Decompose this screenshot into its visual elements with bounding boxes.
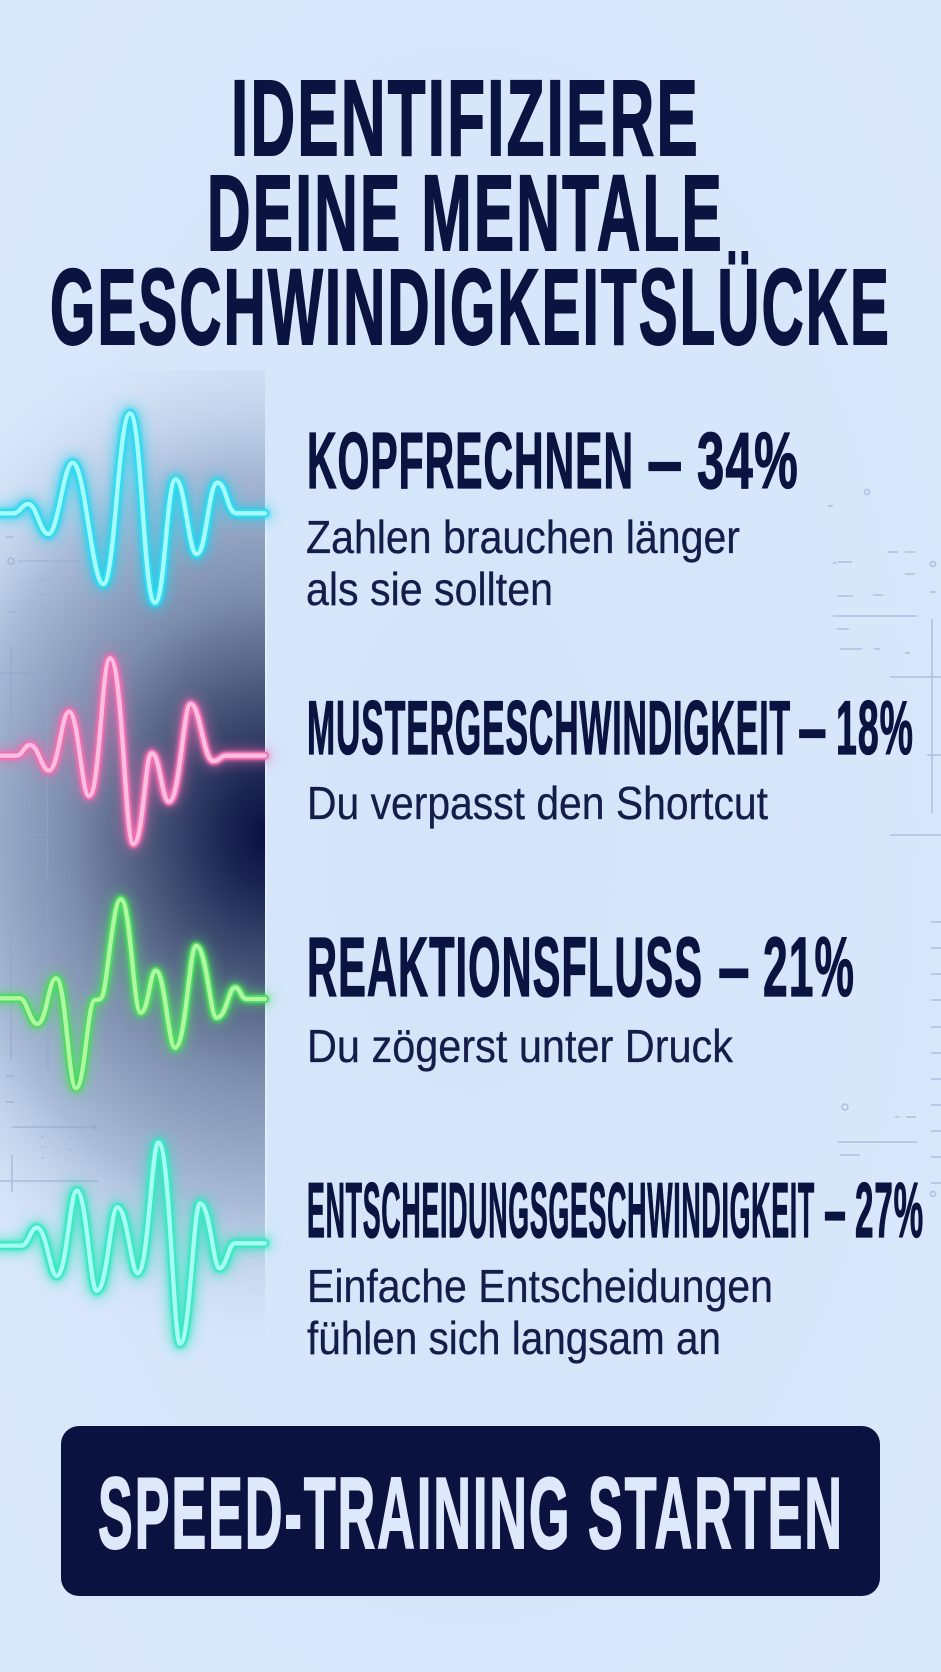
faint HUD marks right	[828, 490, 941, 1196]
button: call to action	[61, 1426, 880, 1596]
item: Kopfrechnen	[306, 416, 799, 615]
faint HUD marks left	[0, 537, 98, 1192]
item: Mustergeschwindigkeit	[307, 686, 914, 829]
description: Du zögerst unter Druck	[307, 1020, 734, 1072]
heading: –	[824, 1166, 847, 1254]
icon: green waveform	[0, 899, 265, 1088]
description: Du verpasst den Shortcut	[307, 777, 768, 829]
heading: KOPFRECHNEN	[307, 416, 634, 505]
heading: –	[647, 416, 684, 505]
heading: –	[798, 686, 828, 771]
title	[50, 57, 891, 367]
heading: 21%	[763, 920, 855, 1014]
description: Zahlen brauchen länger	[306, 511, 740, 563]
heading: –	[718, 920, 751, 1014]
icon: cyan waveform	[0, 413, 265, 603]
icon: teal waveform	[0, 1143, 265, 1344]
heading: 34%	[697, 416, 799, 505]
item: Reaktionsfluss	[307, 920, 855, 1072]
description: als sie sollten	[306, 563, 553, 615]
description: Einfache Entscheidungen	[307, 1260, 773, 1312]
description: fühlen sich langsam an	[307, 1312, 721, 1364]
item: Entscheidungsgeschwindigkeit	[307, 1166, 924, 1364]
dark gradient panel behind waveforms	[0, 370, 267, 1340]
icon: pink waveform	[0, 658, 265, 844]
